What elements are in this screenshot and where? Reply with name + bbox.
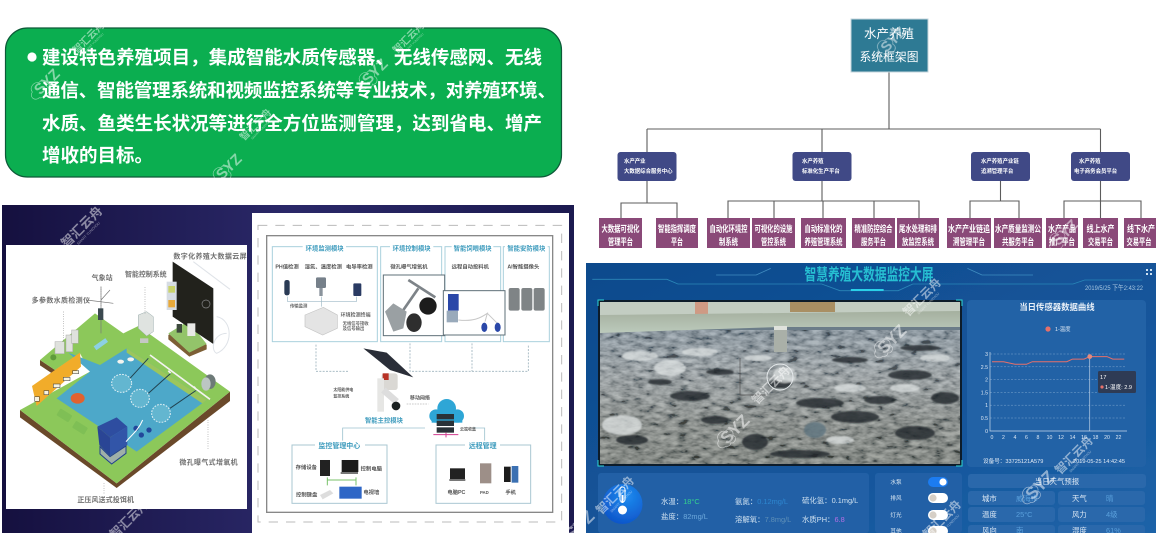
axis labels: 2.5	[981, 365, 988, 371]
system leaf nodes: 水产产业链追	[948, 223, 990, 234]
video: feeding fish pond	[598, 300, 962, 466]
scene labels: 多参数水质检测仪	[32, 296, 90, 305]
sensor notes: 无线信号接收	[343, 320, 369, 327]
main module labels: 移动网络	[410, 394, 430, 401]
watermark: dashboard right	[1017, 433, 1099, 509]
readings: 水质PH：6.8	[802, 515, 845, 524]
system leaf nodes: 水产质量监测公	[995, 223, 1041, 234]
axis labels: 4	[1014, 435, 1017, 441]
system leaf nodes: 可视化的设施	[754, 223, 792, 234]
platform nodes: 水产养殖产业链	[981, 157, 1019, 165]
panel: system framework org chart	[599, 19, 1156, 248]
panel: weather forecast: 风力	[1072, 510, 1087, 519]
axis labels: 10	[1047, 435, 1052, 441]
watermark: navy panel top: 智汇云舟	[58, 203, 106, 251]
watermark: summary box bottom	[208, 106, 276, 188]
platform nodes: 追溯管理平台	[981, 167, 1014, 175]
sensor labels: 远程自动投料机	[452, 263, 490, 271]
panel: isometric aquaculture scene	[6, 245, 247, 509]
device footer	[983, 457, 1125, 465]
panel: big data monitoring dashboard	[586, 263, 1156, 533]
panel: weather forecast: 城市	[982, 494, 997, 503]
scene labels: 正压风送式投饵机	[77, 495, 134, 504]
ground base	[20, 313, 230, 488]
system leaf nodes: 精准防控综合	[854, 223, 892, 234]
watermark: navy panel top: SMART YUNZHOU	[76, 221, 101, 246]
system leaf nodes: 服务平台	[861, 236, 886, 247]
remote management: 手机	[505, 488, 517, 496]
panel: IoT monitoring architecture: 云端收集	[460, 426, 476, 432]
watermark: dashboard right: SMART YUNZHOU	[1069, 449, 1093, 473]
module titles: 环境控制模块	[393, 243, 431, 252]
green shrubs	[50, 354, 88, 435]
highlight marker	[1087, 354, 1092, 431]
aerator rings	[112, 374, 170, 422]
camera icons	[509, 288, 545, 311]
axis labels: 20	[1104, 435, 1110, 441]
system leaf nodes: 交易平台	[1088, 236, 1113, 247]
sensor notes: 环境检测终端	[341, 312, 371, 319]
remote management: 电脑PC	[447, 488, 466, 496]
module titles: 智能饲喂模块	[454, 243, 492, 252]
watermark: dashboard top: SYZ	[874, 321, 910, 358]
axis labels	[981, 352, 1121, 441]
readings: 溶解氧：7.8mg/L	[735, 515, 791, 524]
panel: weather forecast: 晴	[1106, 494, 1114, 503]
blue feeder	[97, 417, 127, 464]
root node: 系统框架图	[860, 50, 918, 64]
dashed connectors	[316, 343, 528, 371]
system leaf nodes	[599, 218, 1156, 248]
axes	[990, 352, 1127, 431]
toggle on	[928, 477, 948, 487]
sensor notes	[290, 302, 371, 332]
watermark: dashboard center: 智汇云舟	[749, 363, 793, 407]
watermark: summary box left	[26, 19, 109, 103]
sensor labels: AI智能摄像头	[507, 263, 540, 271]
axis labels: 8	[1037, 435, 1040, 441]
root node	[851, 19, 928, 72]
platform nodes	[618, 152, 1130, 181]
dashboard title: 智慧养殖大数据监控大屏	[804, 265, 934, 284]
watermark: dashboard right: SYZ	[1022, 467, 1058, 504]
network connectors	[343, 428, 485, 443]
outer dashed frame	[258, 225, 562, 522]
chart title: 当日传感器数据曲线	[1019, 302, 1095, 312]
sensor labels: 湿氮、温度检测	[305, 263, 342, 271]
module titles: 智能安防模块	[507, 243, 546, 252]
remote management: PAD	[480, 490, 489, 495]
system leaf nodes: 管控系统	[761, 236, 786, 247]
weather station	[87, 287, 113, 348]
dashboard header ornament	[592, 268, 1142, 291]
text block: project summary: 水质、鱼类生长状况等进行全方位监测管理，达到省电、增产	[42, 113, 542, 134]
watermark: root node: SYZ	[877, 23, 910, 56]
remote management: 远程管理	[469, 441, 497, 450]
solar monitoring pole	[363, 348, 413, 412]
device footer: 设备号：33725121A579	[983, 457, 1043, 465]
platform nodes: 水产养殖	[1079, 157, 1101, 165]
toggles off	[928, 493, 948, 533]
axis labels: 0.5	[981, 416, 988, 422]
system leaf nodes: 制系统	[719, 236, 738, 247]
monitoring center: 存储设备	[296, 463, 318, 471]
watermark: summary box left: SMART YUNZHOU	[83, 32, 104, 53]
panel: device toggles	[875, 473, 962, 533]
watermark: summary box bottom: SYZ	[213, 151, 246, 183]
monitoring center	[292, 441, 387, 503]
readings: 盐度：82mg/L	[661, 512, 708, 521]
watermark: summary box right: SYZ	[359, 56, 392, 88]
axis labels: 3	[985, 352, 988, 358]
device footer: 2019-05-25 14:42:45	[1073, 459, 1125, 465]
system leaf nodes: 自动标准化的	[804, 223, 842, 234]
sensor notes: 传输监测	[290, 302, 308, 309]
axis labels: 0	[991, 435, 994, 441]
panel: green summary callout	[6, 28, 562, 177]
platform nodes: 水产养殖	[802, 157, 824, 165]
axis labels: 22	[1116, 435, 1121, 441]
system leaf nodes: 溯管理平台	[953, 236, 985, 247]
system leaf nodes: 平台	[671, 236, 683, 247]
axis labels: 0	[985, 429, 988, 435]
grid lines	[990, 354, 1126, 418]
panel: weather forecast: 威海市	[1016, 494, 1039, 503]
cloud server	[429, 399, 464, 437]
watermark: dashboard center	[712, 363, 793, 453]
platform nodes: 标准化生产平台	[802, 167, 840, 175]
panel: weather forecast: 天气	[1072, 494, 1087, 503]
watermark: summary box bottom: 智汇云舟	[237, 106, 274, 143]
main module labels: 监控系统	[333, 393, 349, 399]
main module labels: 智能主控模块	[365, 416, 404, 425]
panel: weather forecast: 25°C	[1016, 510, 1033, 519]
panel: device toggles: 灯光	[890, 511, 902, 519]
main module labels: 太阳能供电	[333, 386, 353, 392]
scene labels: 气象站	[92, 273, 113, 282]
system leaf nodes: 线上水产	[1086, 223, 1114, 234]
text block: project summary	[42, 47, 556, 166]
panel: water quality readings	[598, 473, 869, 533]
watermark: dashboard center: SYZ	[717, 411, 753, 448]
connectors	[621, 72, 1141, 218]
system leaf nodes: 推广平台	[1049, 236, 1075, 247]
blower	[201, 374, 216, 391]
system leaf nodes: 尾水处理和排	[899, 223, 937, 234]
icon: fullscreen	[1146, 269, 1152, 275]
sensor icons	[284, 277, 361, 335]
axis labels: 1.5	[981, 390, 988, 396]
module titles: 环境监测模块	[306, 243, 344, 252]
monitoring center: 电视墙	[363, 488, 380, 496]
panel: weather forecast: 4级	[1106, 510, 1118, 519]
watermark: dashboard bottom left: 智汇云舟	[593, 473, 637, 517]
readings: 水温：18°C	[661, 497, 700, 506]
panel: sensor curve chart	[967, 300, 1146, 467]
aerator photo box	[383, 275, 445, 336]
text block: project summary: 建设特色养殖项目，集成智能水质传感器、无线传感网、无线	[42, 47, 542, 68]
axis labels: 14	[1070, 435, 1075, 441]
system leaf nodes: 共服务平台	[1002, 236, 1034, 247]
pond	[57, 348, 207, 452]
root node: 水产养殖	[864, 26, 914, 41]
air pipes	[130, 355, 210, 408]
watermark: summary box right: 智汇云舟	[390, 19, 427, 56]
watermark: dashboard bottom left: SMART YUNZHOU	[610, 489, 634, 513]
watermark: dashboard top: SMART YUNZHOU	[917, 291, 941, 315]
feeder photo box	[443, 291, 505, 335]
monitoring center: 控制键盘	[296, 490, 318, 498]
system leaf nodes: 放监控系统	[902, 236, 934, 247]
temperature line	[992, 357, 1124, 364]
axis labels: 6	[1025, 435, 1028, 441]
scene labels: 微孔曝气式增氧机	[179, 457, 238, 466]
text block: project summary: 通信、智能管理系统和视频监控系统等专业技术，对养殖环境、	[42, 80, 556, 101]
sensor labels	[275, 263, 540, 271]
sensor notes: 及信号输出	[343, 325, 364, 332]
watermark: dashboard top: 智汇云舟	[900, 275, 944, 319]
watermark: summary box left: 智汇云舟	[70, 19, 107, 56]
readings	[661, 496, 858, 524]
geese	[117, 357, 134, 364]
axis labels: 16	[1081, 435, 1087, 441]
tooltip: 1-温度: 2.9	[1105, 383, 1132, 391]
tooltip: 17	[1100, 375, 1106, 381]
icon: thermometer	[602, 484, 642, 524]
platform nodes: 大数据综合服务中心	[624, 167, 673, 175]
panel: navy backdrop for system diagrams	[2, 205, 574, 533]
control cabinet	[138, 312, 153, 343]
scene labels	[32, 251, 247, 504]
system leaf nodes: 自动化环境控	[710, 223, 748, 234]
system leaf nodes: 大数据可视化	[602, 223, 640, 234]
scene labels: 数字化养殖大数据云屏	[173, 251, 247, 260]
axis labels: 2	[985, 378, 988, 384]
watermark: dashboard right: 智汇云舟	[1052, 433, 1096, 477]
water quality instruments	[55, 330, 78, 354]
panel: weather forecast: 温度	[982, 510, 997, 519]
pond post	[774, 330, 787, 352]
watermark: summary box bottom: SMART YUNZHOU	[250, 119, 271, 140]
panel: weather forecast: 当日天气预报	[1035, 477, 1080, 486]
blue aerator floats	[133, 426, 152, 438]
legend: 1-温度	[1055, 325, 1071, 333]
watermark: summary box left: SYZ	[31, 66, 64, 98]
panel: device toggles: 排风	[890, 494, 902, 502]
legend	[1045, 325, 1071, 333]
panel: device toggles: 水泵	[890, 478, 902, 486]
monitoring center: 监控管理中心	[318, 441, 360, 450]
tooltip	[1098, 371, 1136, 393]
platform nodes: 水产产业	[624, 157, 646, 165]
leader lines	[63, 287, 208, 493]
watermark: dashboard top	[869, 275, 947, 363]
module titles	[303, 243, 548, 252]
readings: 氨氮：0.12mg/L	[735, 497, 788, 506]
sensor labels: PH值检测	[275, 263, 299, 271]
bullet	[27, 52, 37, 62]
system leaf nodes: 智能指挥调度	[658, 223, 696, 234]
watermark: leaf nodes: SYZ	[1049, 216, 1082, 249]
axis labels: 12	[1058, 435, 1064, 441]
orange fish boat	[71, 393, 85, 404]
main module labels	[333, 386, 430, 425]
module boxes	[272, 247, 549, 342]
panel: IoT monitoring architecture	[252, 213, 569, 533]
axis labels: 1	[985, 403, 988, 409]
monitoring center: 控制电脑	[361, 465, 383, 473]
readings: 硫化氢：0.1mg/L	[802, 496, 858, 505]
text block: project summary: 增收的目标。	[42, 145, 153, 166]
date time: 2019/5/25 下午2:43:22	[1085, 283, 1143, 292]
remote management	[436, 441, 531, 503]
axis labels: 18	[1093, 435, 1098, 441]
sensor labels: 微孔曝气增氧机	[390, 263, 428, 271]
yellow sensor sign	[32, 353, 81, 406]
data screen	[167, 262, 230, 353]
system leaf nodes: 水产产品	[1048, 223, 1076, 234]
platform nodes: 电子商务会员平台	[1074, 167, 1118, 175]
watermark: summary box right: SMART YUNZHOU	[403, 32, 424, 53]
scene labels: 智能控制系统	[125, 270, 167, 279]
watermark: dashboard bottom left	[557, 473, 640, 533]
panel: weather forecast	[968, 474, 1146, 533]
axis labels: 2	[1002, 435, 1005, 441]
system leaf nodes: 养殖管理系统	[804, 236, 842, 247]
watermark: summary box right	[354, 19, 429, 93]
system leaf nodes: 管理平台	[608, 236, 633, 247]
sensor labels: 电导率检测	[346, 263, 373, 271]
